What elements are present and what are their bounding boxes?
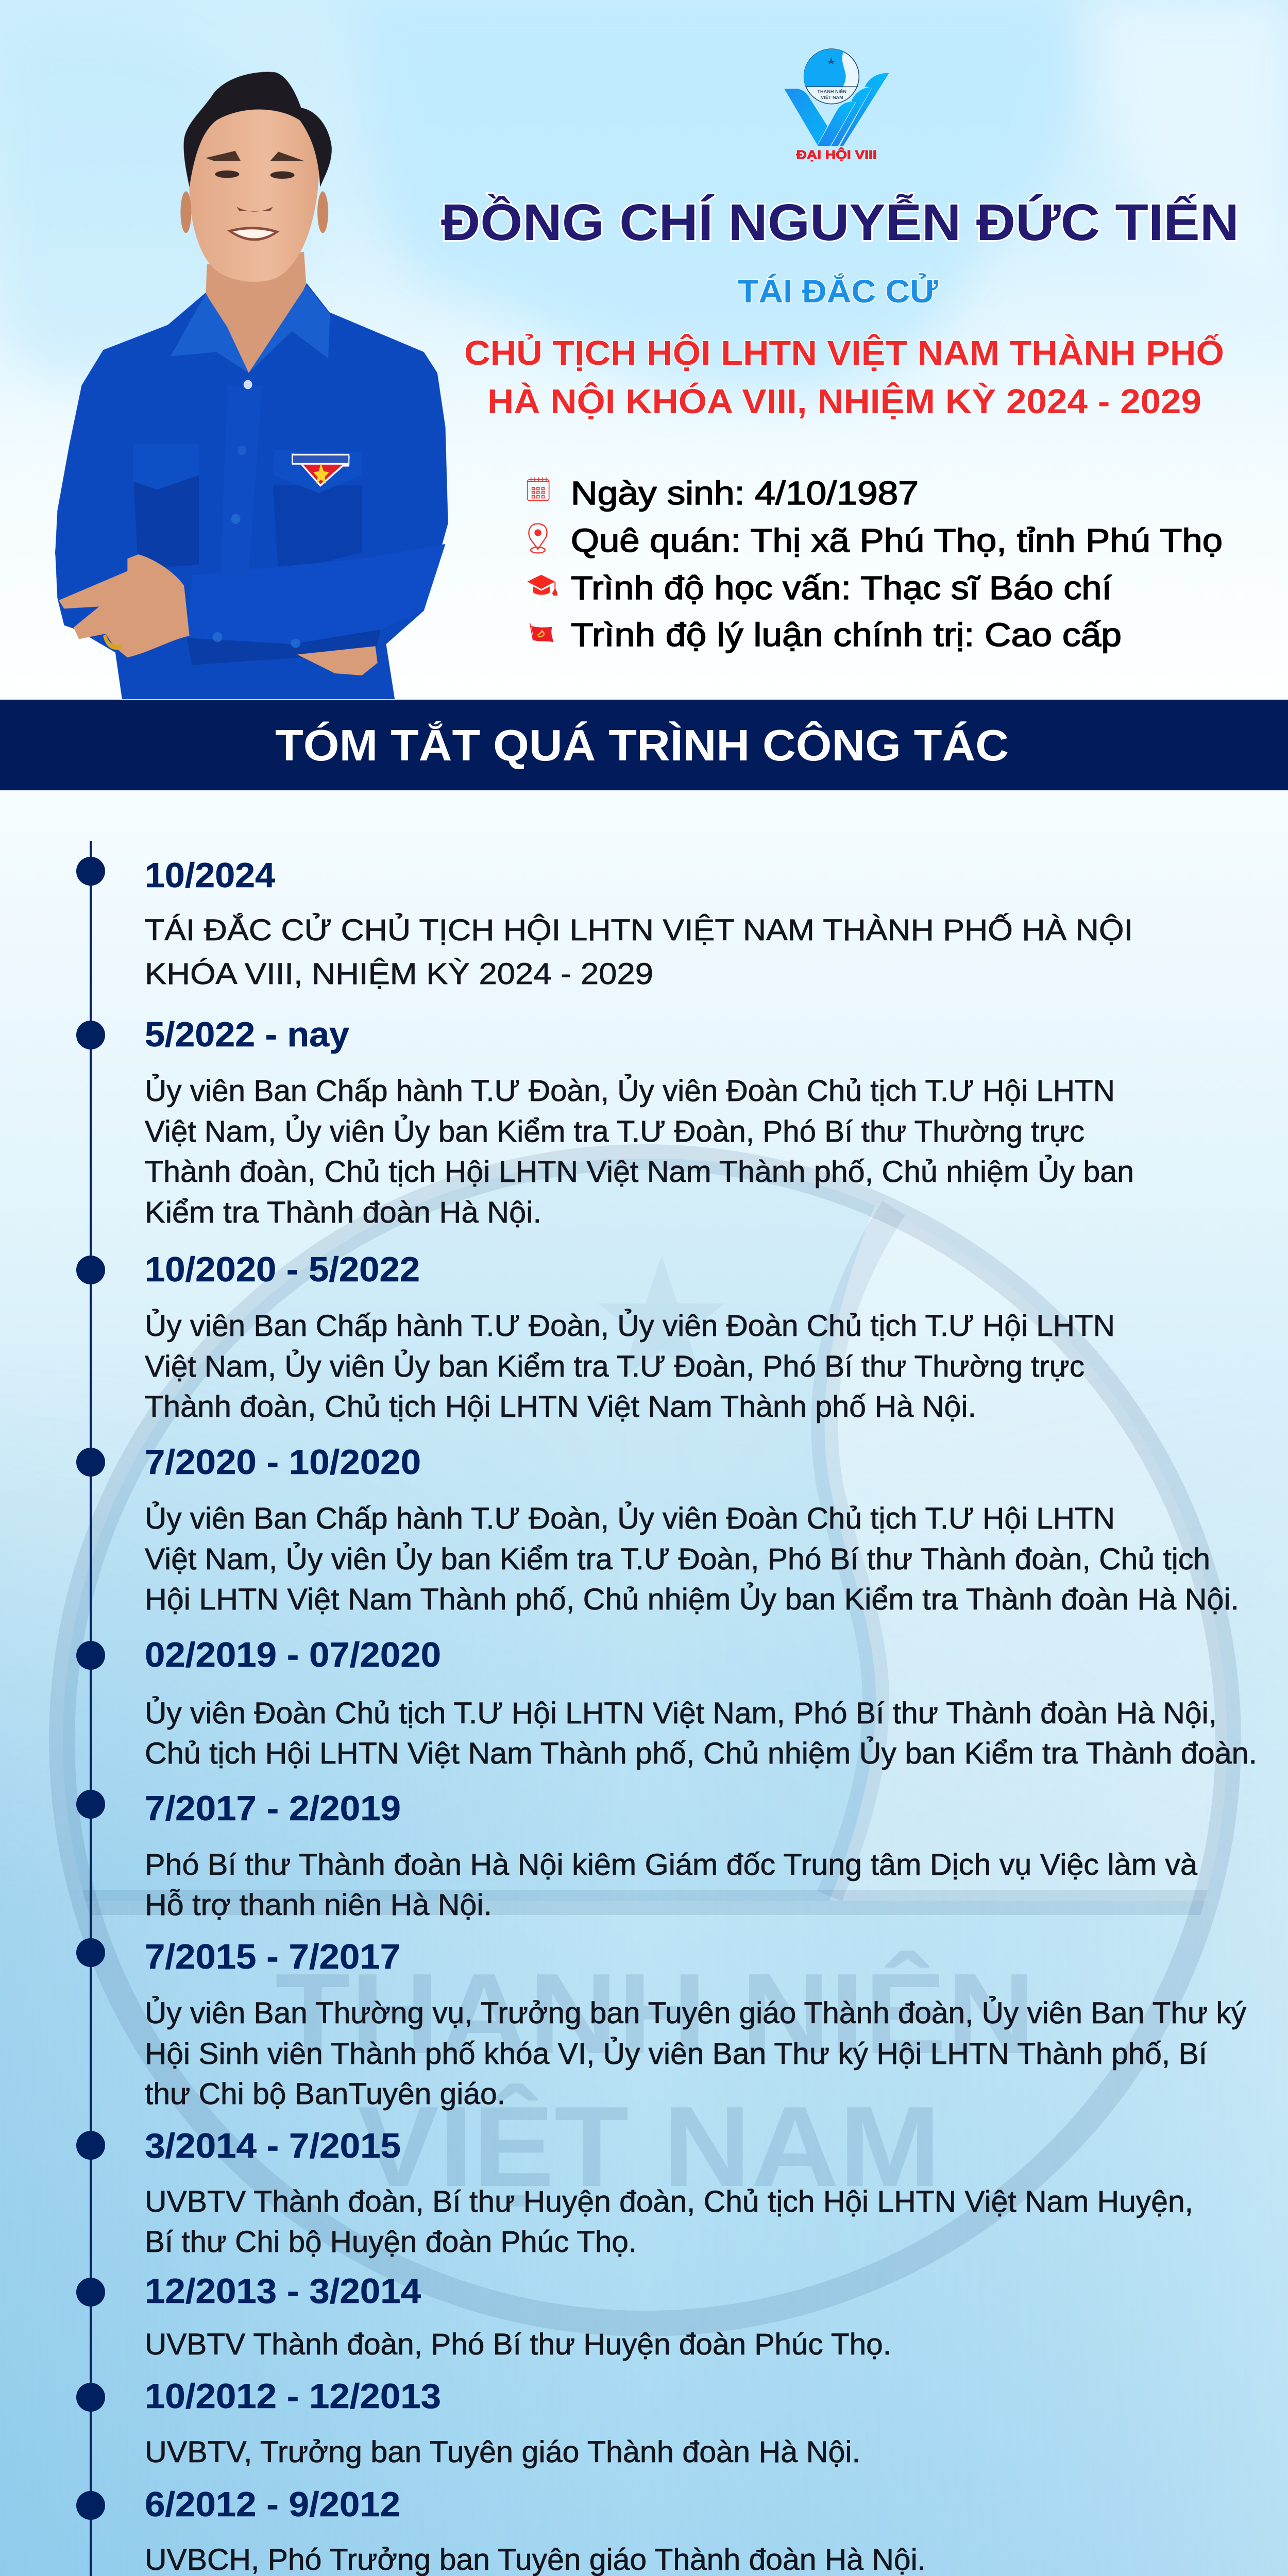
entry 02/2019 - 07/2020: 02/2019 - 07/2020 (145, 1635, 441, 1674)
icon: party flag (530, 623, 554, 642)
entry 5/2022 - nay: Ủy viên Ban Chấp hành T.Ư Đoàn, Ủy viên Đoàn Chủ tịch T.Ư Hội LHTN (145, 1074, 1115, 1108)
title: ĐỒNG CHÍ NGUYỄN ĐỨC TIẾN (441, 194, 1239, 251)
entry 12/2013 - 3/2014 (76, 2272, 891, 2361)
eyebrows eyes nose mouth (206, 151, 241, 161)
subtitle: re-elected: TÁI ĐẮC CỬ (738, 273, 939, 310)
entry 10/2024: KHÓA VIII, NHIỆM KỲ 2024 - 2029 (145, 957, 653, 991)
personal facts (527, 474, 1223, 653)
logo Đại hội VIII: ĐẠI HỘI VIII (796, 147, 877, 162)
face (189, 106, 319, 282)
entry 10/2012 - 12/2013: 10/2012 - 12/2013 (145, 2377, 441, 2416)
entry 7/2020 - 10/2020 (76, 1443, 1239, 1616)
icon: graduation cap (527, 575, 557, 596)
entry 5/2022 - nay: Việt Nam, Ủy viên Ủy ban Kiểm tra T.Ư Đoàn, Phó Bí thư Thường trực (145, 1115, 1084, 1148)
entry 10/2024 (76, 856, 1133, 991)
entry 5/2022 - nay: Kiểm tra Thành đoàn Hà Nội. (145, 1196, 541, 1229)
entry 6/2012 - 9/2012: 6/2012 - 9/2012 (145, 2485, 400, 2524)
entry 3/2014 - 7/2015: UVBTV Thành đoàn, Bí thư Huyện đoàn, Chủ tịch Hội LHTN Việt Nam Huyện, (145, 2185, 1193, 2218)
timeline (76, 841, 1257, 2576)
entry 10/2020 - 5/2022: Ủy viên Ban Chấp hành T.Ư Đoàn, Ủy viên Đoàn Chủ tịch T.Ư Hội LHTN (145, 1309, 1115, 1343)
entry 7/2020 - 10/2020: Việt Nam, Ủy viên Ủy ban Kiểm tra T.Ư Đoàn, Phó Bí thư Thành đoàn, Chủ tịch (145, 1543, 1210, 1576)
entry 02/2019 - 07/2020: Ủy viên Đoàn Chủ tịch T.Ư Hội LHTN Việt Nam, Phó Bí thư Thành đoàn Hà Nội, (145, 1697, 1217, 1730)
entry 10/2020 - 5/2022: 10/2020 - 5/2022 (145, 1250, 420, 1289)
neck (206, 252, 307, 375)
entry 5/2022 - nay (76, 1015, 1134, 1229)
position heading (464, 333, 1224, 421)
entry 12/2013 - 3/2014: UVBTV Thành đoàn, Phó Bí thư Huyện đoàn Phúc Thọ. (145, 2328, 891, 2361)
personal facts: Trình độ lý luận chính trị: Cao cấp (571, 616, 1122, 653)
entry 7/2017 - 2/2019 (76, 1789, 1198, 1922)
timeline axis (90, 841, 92, 2576)
entry 7/2020 - 10/2020: Hội LHTN Việt Nam Thành phố, Chủ nhiệm Ủy ban Kiểm tra Thành đoàn Hà Nội. (145, 1583, 1239, 1616)
hair (184, 72, 332, 187)
entry 7/2015 - 7/2017 (76, 1937, 1246, 2111)
icon: location pin (529, 524, 547, 553)
blue shirt (55, 283, 448, 699)
entry 7/2015 - 7/2017: 7/2015 - 7/2017 (145, 1937, 400, 1976)
entry 02/2019 - 07/2020 (76, 1635, 1257, 1770)
buttons (244, 380, 252, 389)
entry 12/2013 - 3/2014: 12/2013 - 3/2014 (145, 2272, 421, 2311)
logo Đại hội VIII (784, 49, 889, 162)
entry 5/2022 - nay: 5/2022 - nay (145, 1015, 349, 1054)
hands (59, 554, 190, 657)
entry 7/2020 - 10/2020: Ủy viên Ban Chấp hành T.Ư Đoàn, Ủy viên Đoàn Chủ tịch T.Ư Hội LHTN (145, 1502, 1115, 1535)
entry 7/2020 - 10/2020: 7/2020 - 10/2020 (145, 1443, 421, 1482)
watermark emblem: Thanh Niên Việt Nam: VIỆT NAM (358, 2083, 941, 2211)
logo Đại hội VIII: VIỆT NAM (821, 94, 843, 100)
entry 10/2024: 10/2024 (145, 856, 275, 895)
entry 3/2014 - 7/2015: Bí thư Chi bộ Huyện đoàn Phúc Thọ. (145, 2225, 637, 2259)
position heading: CHỦ TỊCH HỘI LHTN VIỆT NAM THÀNH PHỐ (464, 333, 1224, 372)
section header band (0, 700, 1288, 790)
position heading: HÀ NỘI KHÓA VIII, NHIỆM KỲ 2024 - 2029 (487, 382, 1201, 421)
entry 3/2014 - 7/2015 (76, 2126, 1193, 2259)
entry 10/2020 - 5/2022: Thành đoàn, Chủ tịch Hội LHTN Việt Nam Thành phố Hà Nội. (145, 1390, 976, 1423)
portrait of Nguyễn Đức Tiến (55, 72, 448, 699)
entry 7/2015 - 7/2017: thư Chi bộ BanTuyên giáo. (145, 2077, 505, 2111)
icon: calendar (528, 478, 549, 501)
emblem circle (804, 49, 859, 104)
personal facts: Trình độ học vấn: Thạc sĩ Báo chí (571, 569, 1112, 606)
entry 7/2017 - 2/2019: 7/2017 - 2/2019 (145, 1789, 401, 1828)
entry 10/2024: TÁI ĐẮC CỬ CHỦ TỊCH HỘI LHTN VIỆT NAM THÀNH PHỐ HÀ NỘI (145, 913, 1133, 947)
entry 7/2015 - 7/2017: Hội Sinh viên Thành phố khóa VI, Ủy viên Ban Thư ký Hội LHTN Thành phố, Bí (145, 2037, 1207, 2071)
entry 7/2017 - 2/2019: Phó Bí thư Thành đoàn Hà Nội kiêm Giám đốc Trung tâm Dịch vụ Việc làm và (145, 1848, 1198, 1882)
entry 10/2012 - 12/2013: UVBTV, Trưởng ban Tuyên giáo Thành đoàn Hà Nội. (145, 2435, 860, 2469)
entry 10/2020 - 5/2022: Việt Nam, Ủy viên Ủy ban Kiểm tra T.Ư Đoàn, Phó Bí thư Thường trực (145, 1350, 1084, 1383)
section header band: TÓM TẮT QUÁ TRÌNH CÔNG TÁC (275, 721, 1009, 770)
entry 6/2012 - 9/2012 (76, 2485, 926, 2576)
V wings (784, 89, 827, 145)
entry 7/2015 - 7/2017: Ủy viên Ban Thường vụ, Trưởng ban Tuyên giáo Thành đoàn, Ủy viên Ban Thư ký (145, 1996, 1246, 2030)
watercolor wash top (0, 0, 1288, 395)
shirt shading (133, 444, 199, 569)
watermark emblem: Thanh Niên Việt Nam (62, 1157, 1236, 2324)
entry 10/2020 - 5/2022 (76, 1250, 1115, 1423)
entry 5/2022 - nay: Thành đoàn, Chủ tịch Hội LHTN Việt Nam Thành phố, Chủ nhiệm Ủy ban (145, 1155, 1134, 1189)
badge on pocket (292, 454, 349, 485)
entry 02/2019 - 07/2020: Chủ tịch Hội LHTN Việt Nam Thành phố, Chủ nhiệm Ủy ban Kiểm tra Thành đoàn. (145, 1737, 1257, 1770)
personal facts: Quê quán: Thị xã Phú Thọ, tỉnh Phú Thọ (571, 522, 1223, 559)
entry 10/2012 - 12/2013 (76, 2377, 860, 2469)
entry 3/2014 - 7/2015: 3/2014 - 7/2015 (145, 2126, 401, 2165)
watermark emblem: Thanh Niên Việt Nam: THANH NIÊN (275, 1950, 1036, 2078)
entry 7/2017 - 2/2019: Hỗ trợ thanh niên Hà Nội. (145, 1888, 492, 1922)
logo Đại hội VIII: THANH NIÊN (817, 89, 846, 94)
entry 6/2012 - 9/2012: UVBCH, Phó Trưởng ban Tuyên giáo Thành đoàn Hà Nội. (145, 2543, 926, 2576)
personal facts: Ngày sinh: 4/10/1987 (571, 474, 919, 512)
